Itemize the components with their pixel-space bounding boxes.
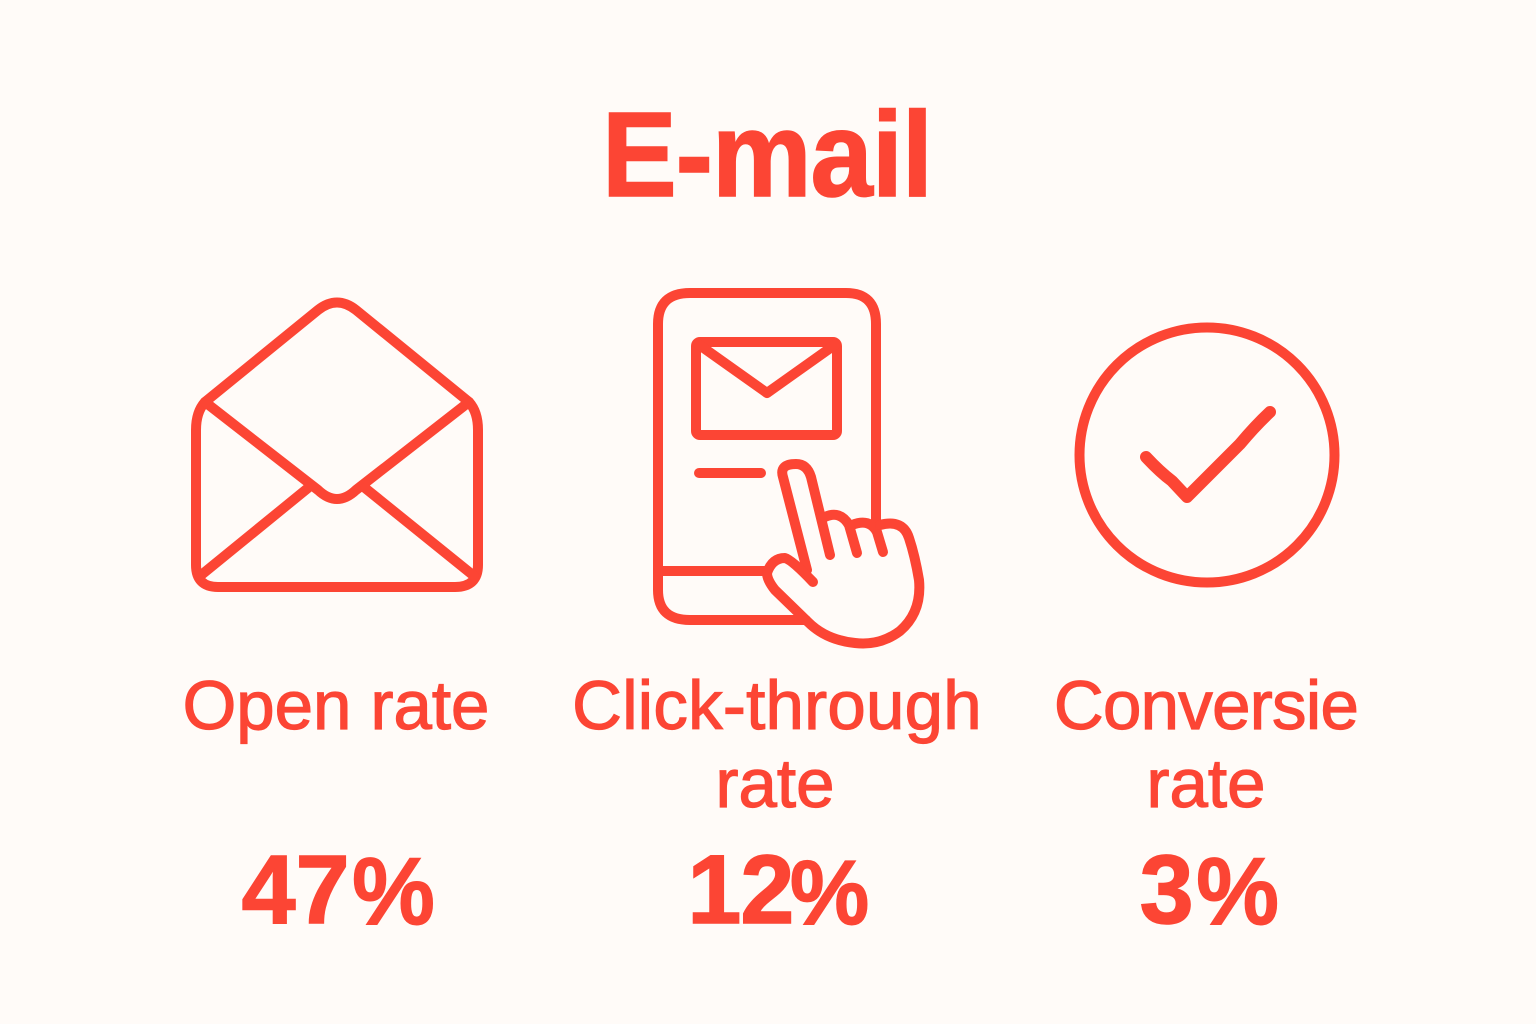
label: click-through rate: rate xyxy=(716,745,834,822)
value: 12%: 12% xyxy=(687,835,869,944)
label: click-through rate xyxy=(572,667,982,822)
icon: open envelope xyxy=(196,302,478,587)
value: 3%: 3% xyxy=(1140,835,1278,944)
label: open rate: Open rate xyxy=(183,667,489,744)
label: conversie rate: Conversie xyxy=(1054,667,1358,744)
label: conversie rate: rate xyxy=(1147,745,1265,822)
value: 47%: 47% xyxy=(242,835,434,944)
icon: phone with hand xyxy=(658,293,919,644)
label: conversie rate xyxy=(1054,667,1358,822)
label: click-through rate: Click-through xyxy=(572,667,982,744)
title: E-mail xyxy=(602,87,932,222)
icon: check circle xyxy=(1080,328,1334,582)
